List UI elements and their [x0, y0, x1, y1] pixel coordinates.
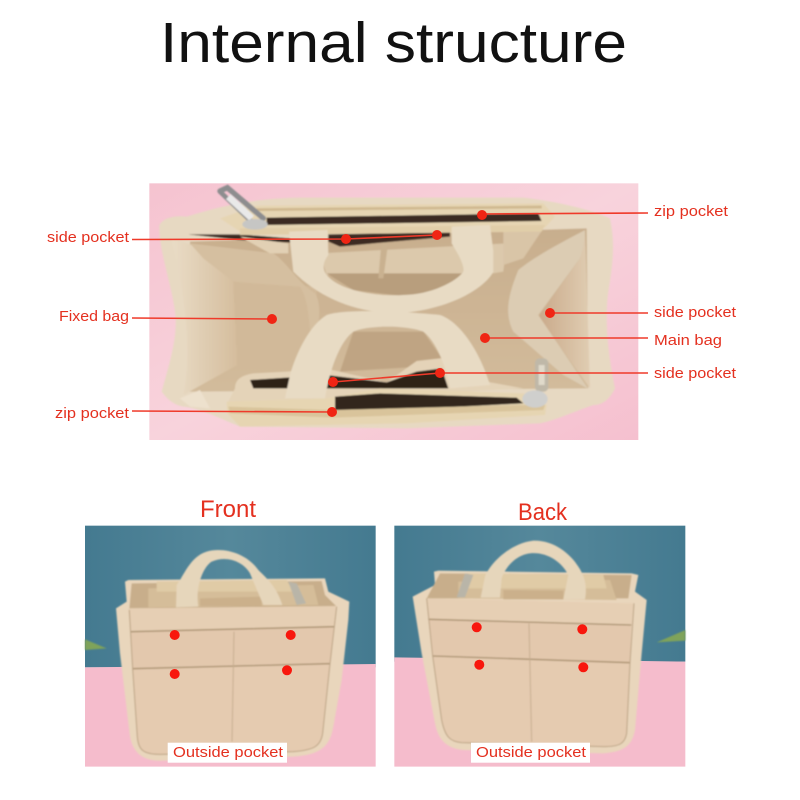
heading: front: Front	[200, 496, 256, 523]
label: front outside pocket: Outside pocket	[173, 744, 284, 761]
heading: back: Back	[518, 499, 568, 526]
callouts: internal bag pointers	[132, 213, 648, 412]
panel: back photo	[394, 526, 685, 767]
labels: left side: zip pocket	[55, 405, 130, 422]
labels: left side: Fixed bag	[59, 308, 129, 325]
marker dots: front	[170, 630, 296, 679]
labels: right side: side pocket	[654, 365, 737, 382]
panel: internal bag photo	[149, 183, 638, 440]
title: Internal structure	[160, 11, 627, 75]
labels: right side: zip pocket	[654, 203, 729, 220]
marker dots: internal bag	[267, 210, 555, 417]
labels: right side	[654, 203, 737, 382]
labels: right side: side pocket	[654, 304, 737, 321]
labels: left side: side pocket	[47, 229, 130, 246]
label: back outside pocket: Outside pocket	[476, 744, 587, 761]
panel: front photo	[85, 526, 376, 767]
labels: right side: Main bag	[654, 332, 722, 349]
marker dots: back	[472, 622, 588, 672]
labels: left side	[47, 229, 130, 422]
